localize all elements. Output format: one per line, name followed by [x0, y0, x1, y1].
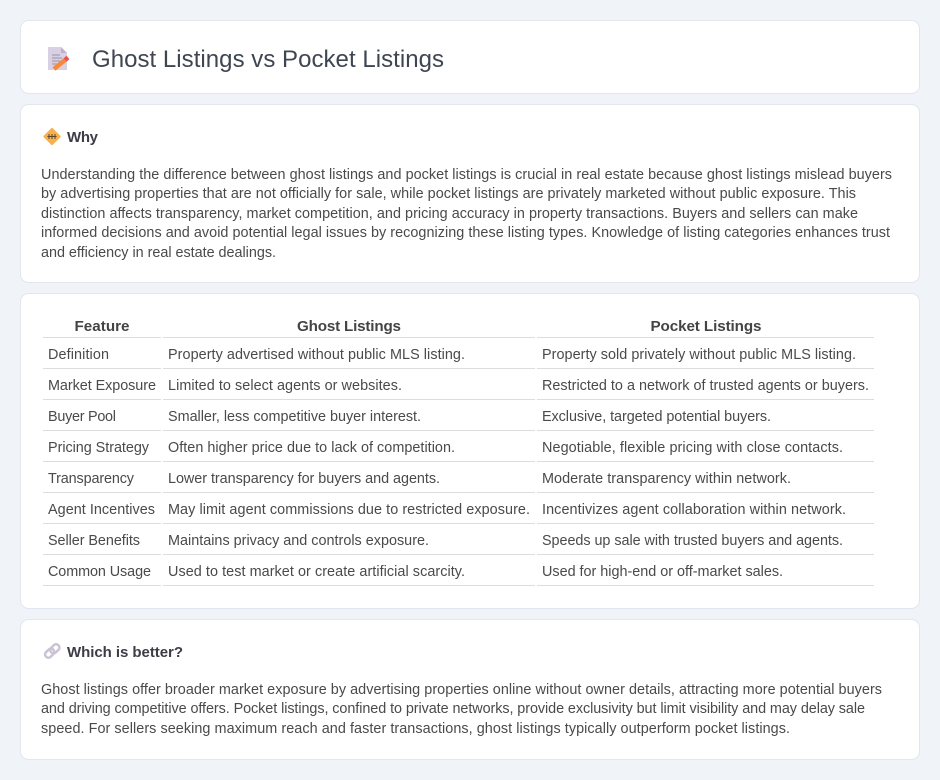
table header: Feature — [74, 318, 130, 335]
text block: why — [41, 167, 892, 261]
row: Pricing Strategy: Often higher price due to lack of competition. — [168, 440, 455, 456]
panel: why — [20, 104, 920, 282]
row: Pricing Strategy: Pricing Strategy — [48, 440, 150, 456]
text block: which is better: Ghost listings offer broader market exposure by advertising properties online without owner details, attracting more potential buyers — [41, 682, 882, 698]
text block: why: by advertising properties that are not officially for sale, while pocket listings are privately marketed without public exposure. This — [41, 186, 856, 202]
text block: which is better — [41, 682, 882, 737]
icon: document with pencil — [48, 47, 68, 70]
row: Seller Benefits: Speeds up sale with trusted buyers and agents. — [542, 533, 843, 549]
row: Buyer Pool: Exclusive, targeted potential buyers. — [542, 409, 771, 425]
table header — [43, 318, 874, 338]
text block: which is better: speed. For sellers seeking maximum reach and faster transactions, ghost listings typically outperform pocket listings. — [41, 721, 790, 737]
row: Pricing Strategy — [43, 440, 874, 462]
row: Market Exposure: Market Exposure — [48, 378, 156, 394]
row: Seller Benefits — [43, 533, 874, 555]
row: Buyer Pool — [43, 409, 874, 431]
row: Seller Benefits: Seller Benefits — [48, 533, 140, 549]
text block: why: Understanding the difference between ghost listings and pocket listings is crucial in real estate because ghost listings mislead buyers — [41, 167, 892, 183]
row: Pricing Strategy: Negotiable, flexible pricing with close contacts. — [542, 440, 843, 456]
row: Transparency: Transparency — [48, 471, 135, 487]
table header: Pocket Listings — [650, 318, 762, 335]
row: Agent Incentives — [43, 502, 874, 524]
row: Market Exposure: Limited to select agents or websites. — [168, 378, 402, 394]
row: Transparency: Moderate transparency within network. — [542, 471, 791, 487]
row: Common Usage — [43, 564, 874, 586]
row: Market Exposure — [43, 378, 874, 400]
table header: Ghost Listings — [297, 318, 401, 335]
panel: comparison table — [20, 294, 920, 608]
heading: why: Why — [67, 129, 99, 146]
text block: why: and efficiency in real estate dealings. — [41, 245, 276, 261]
row: Common Usage: Common Usage — [48, 564, 151, 580]
icon: warning diamond — [44, 128, 60, 144]
row: Common Usage: Used for high-end or off-market sales. — [542, 564, 783, 580]
row: Market Exposure: Restricted to a network of trusted agents or buyers. — [542, 378, 869, 394]
title: Ghost Listings vs Pocket Listings — [92, 46, 444, 73]
row: Buyer Pool: Buyer Pool — [48, 409, 116, 425]
row: Seller Benefits: Maintains privacy and controls exposure. — [168, 533, 429, 549]
text block: which is better: and driving competitive offers. Pocket listings, confined to private networks, provide exclusivity but limit visibility and may delay sale — [41, 701, 865, 717]
row: Definition: Property advertised without public MLS listing. — [168, 347, 465, 363]
row: Definition — [43, 347, 874, 369]
text block: why: distinction affects transparency, market competition, and pricing accuracy in property transactions. Buyers and sellers can make — [41, 206, 858, 222]
row: Definition: Property sold privately without public MLS listing. — [542, 347, 856, 363]
row: Agent Incentives: Agent Incentives — [48, 502, 155, 518]
icon: chain link — [44, 643, 61, 659]
text block: why: informed decisions and avoid potential legal issues by recognizing these listing types. Knowledge of listing categories enhances trust — [41, 225, 890, 241]
panel: header — [20, 20, 920, 94]
row: Common Usage: Used to test market or create artificial scarcity. — [168, 564, 465, 580]
row: Transparency — [43, 471, 874, 493]
row: Agent Incentives: Incentivizes agent collaboration within network. — [542, 502, 846, 518]
row: Agent Incentives: May limit agent commissions due to restricted exposure. — [168, 502, 530, 518]
row: Transparency: Lower transparency for buyers and agents. — [168, 471, 440, 487]
heading: which is better: Which is better? — [67, 644, 183, 661]
panel: which is better — [20, 620, 920, 760]
row: Definition: Definition — [48, 347, 109, 363]
row: Buyer Pool: Smaller, less competitive buyer interest. — [168, 409, 421, 425]
